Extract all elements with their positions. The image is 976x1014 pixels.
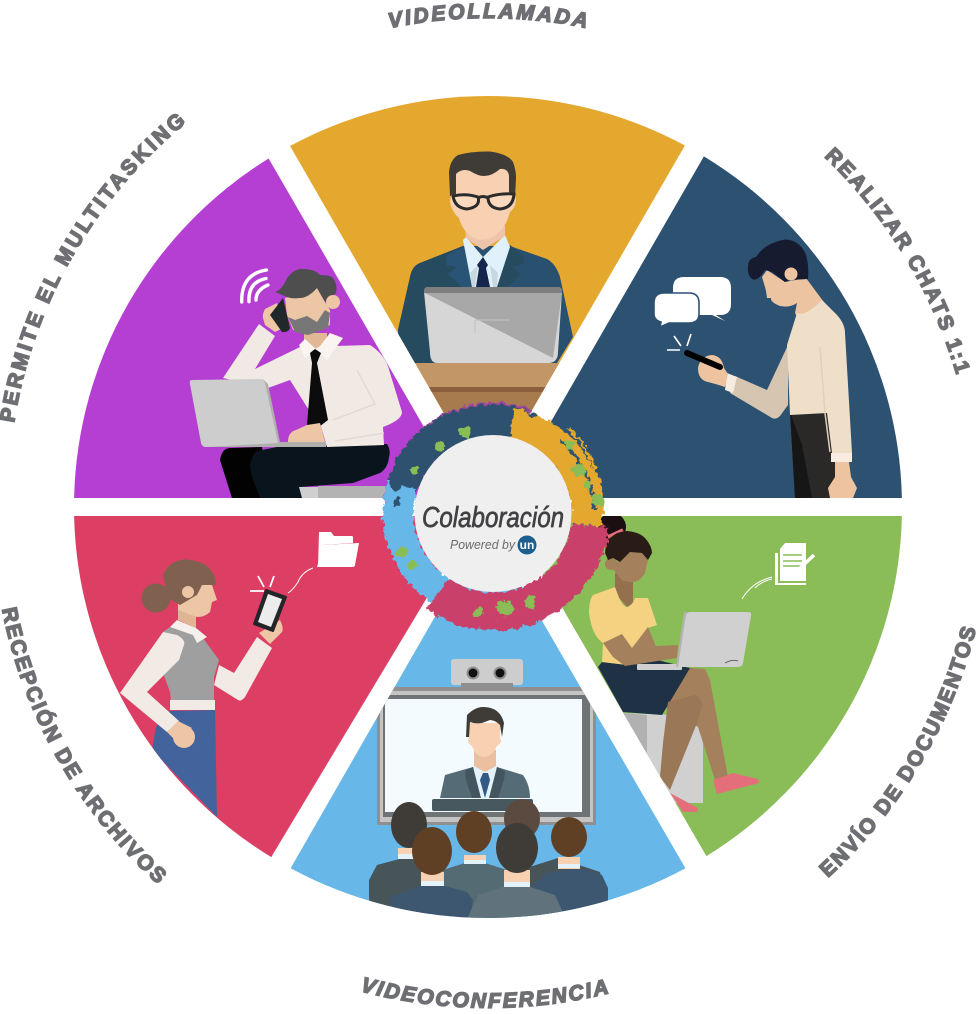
panel: recepción de archivos <box>74 516 442 858</box>
label: permite el multitasking: PERMITE EL MULTITASKING <box>0 114 184 422</box>
laptop <box>190 379 326 447</box>
panel: videoconferencia <box>290 582 686 918</box>
center: white badge <box>414 435 572 592</box>
person: man on the phone <box>220 269 402 498</box>
label: envío de documentos: ENVÍO DE DOCUMENTOS <box>818 626 976 878</box>
panel: videollamada <box>290 96 685 440</box>
desk <box>415 363 560 440</box>
panel: realizar chats <box>550 156 902 498</box>
label: videoconferencia: VIDEOCONFERENCIA <box>363 976 609 1009</box>
icon: un logo: un <box>520 538 534 552</box>
video screen <box>377 687 596 825</box>
center: paint splash ring <box>389 408 604 617</box>
person: woman with laptop <box>589 513 759 812</box>
label: videollamada: VIDEOLLAMADA <box>388 2 586 29</box>
center: title: Colaboración <box>422 502 564 534</box>
camera <box>451 659 523 688</box>
person: man with glasses <box>398 151 573 363</box>
center: powered by: Powered by <box>450 537 516 552</box>
icon: document and pen <box>742 543 814 599</box>
label: realizar chats: REALIZAR CHATS 1:1 <box>824 146 970 375</box>
panel: envío de documentos <box>542 516 902 856</box>
icon: phone sparkle <box>250 576 274 591</box>
presenter <box>432 707 533 811</box>
icon: phone sparkle <box>667 334 691 350</box>
person: woman with phone <box>120 559 286 817</box>
person: man reading phone <box>687 240 857 498</box>
audience <box>369 799 610 925</box>
label: recepción de archivos: RECEPCIÓN DE ARCHIVOS <box>1 606 166 883</box>
icon: un logo <box>518 536 536 554</box>
icon: chat bubbles <box>654 277 731 327</box>
laptop <box>424 287 562 363</box>
icon: phone signal <box>242 270 268 302</box>
icon: folder <box>288 532 359 593</box>
panel: multitasking <box>74 158 440 498</box>
laptop <box>637 612 751 670</box>
